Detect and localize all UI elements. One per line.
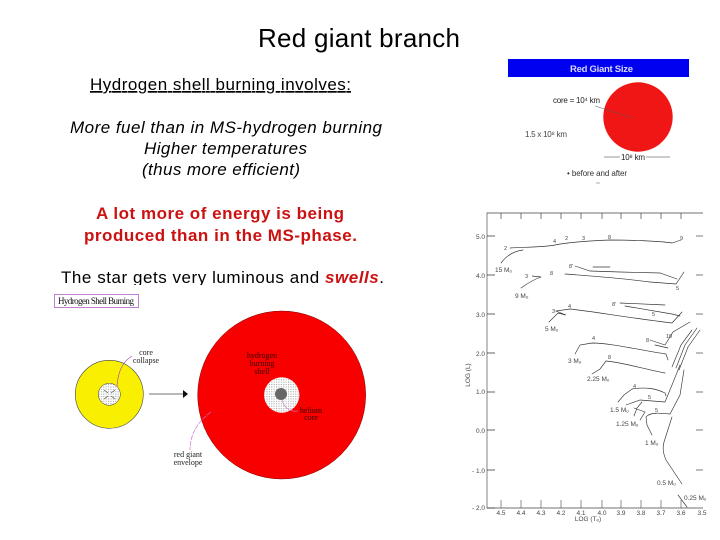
- evolution tracks: [501, 240, 700, 507]
- mass labels: 2.25 Mₒ: [587, 376, 610, 383]
- mass labels: 5 Mₒ: [545, 326, 559, 333]
- x axis labels: 4.5: [496, 510, 506, 517]
- text block: hydrogen shell burning: Hydrogen shell burning involves:: [90, 75, 351, 94]
- 0.25 solar mass track: [678, 495, 687, 507]
- core label: core = 10⁴ km: [553, 96, 600, 105]
- 0.5 solar mass track: [663, 417, 682, 484]
- 1 solar mass track: [646, 370, 684, 435]
- core collapse label: [117, 348, 160, 387]
- 9 solar mass track: [521, 272, 684, 288]
- x axis labels: 4.0: [597, 510, 607, 517]
- x axis labels: 3.7: [656, 510, 666, 517]
- red giant envelope label: [174, 412, 211, 467]
- x axis labels: [496, 510, 707, 523]
- yellow star: [75, 360, 143, 428]
- y axis labels: 1.0: [476, 389, 485, 396]
- y axis labels: - 1.0: [472, 468, 485, 475]
- track point numbers: 2: [504, 246, 507, 252]
- core collapse label: collapse: [133, 356, 160, 365]
- y axis labels: 0.0: [476, 428, 485, 435]
- blue header bar: [508, 59, 689, 77]
- mass labels: 1 Mₒ: [645, 440, 659, 447]
- helium core label: core: [304, 413, 318, 422]
- diagram label box: Hydrogen Shell Burning: [58, 296, 134, 306]
- 2.25 solar mass track: [592, 361, 665, 374]
- x axis labels: 4.3: [536, 510, 546, 517]
- helium core label: helium: [300, 406, 323, 415]
- x axis labels: 3.8: [636, 510, 646, 517]
- core collapse label: core: [139, 348, 153, 357]
- size label: 1.5 x 10⁸ km: [525, 130, 567, 139]
- 1.5 and 1.25 solar mass tracks: [618, 388, 666, 402]
- y axis labels: - 2.0: [472, 505, 485, 512]
- track point numbers: 3: [582, 236, 585, 242]
- chart: HR diagram of stellar evolution tracks: [465, 213, 707, 523]
- track point numbers: 8': [612, 302, 616, 308]
- y axis labels: 2.0: [476, 351, 485, 358]
- core label: [553, 96, 632, 118]
- x axis labels: 4.4: [516, 510, 526, 517]
- track point numbers: 8: [608, 235, 611, 241]
- x axis labels: 4.2: [556, 510, 566, 517]
- red giant circle: [603, 82, 673, 152]
- x axis labels: LOG (Tₑ): [575, 516, 601, 523]
- text block: energy statement in red: produced than in the MS-phase.: [84, 226, 357, 245]
- mass labels: 9 Mₒ: [515, 293, 529, 300]
- hydrogen burning shell label: [247, 351, 277, 376]
- mass labels: 0.25 Mₒ: [684, 495, 707, 502]
- x axis labels: 3.6: [676, 510, 686, 517]
- arrow: [149, 390, 188, 398]
- track point numbers: 4: [633, 384, 636, 390]
- diameter dimension: 10⁸ km: [621, 153, 645, 162]
- track point numbers: 4: [592, 336, 595, 342]
- track point numbers: 5: [652, 312, 655, 318]
- x axis labels: 3.5: [697, 510, 707, 517]
- x axis labels: 3.9: [616, 510, 626, 517]
- y axis labels: 4.0: [476, 273, 485, 280]
- mass labels: 15 Mₒ: [495, 267, 512, 274]
- y axis labels: 3.0: [476, 312, 485, 319]
- mass labels: [495, 267, 707, 502]
- track point numbers: 8: [608, 355, 611, 361]
- track point numbers: 5: [655, 408, 658, 414]
- mass labels: 0.5 Mₒ: [657, 480, 676, 487]
- y axis labels: 5.0: [476, 234, 485, 241]
- text block: hydrogen shell burning: More fuel than in MS-hydrogen burning: [70, 118, 383, 137]
- text block: hydrogen shell burning: Higher temperatures: [144, 139, 308, 158]
- 15 solar mass track: [501, 240, 681, 263]
- text block: hydrogen shell burning: (thus more efficient): [142, 160, 300, 179]
- text block: energy statement in red: A lot more of energy is being: [96, 204, 344, 223]
- track point numbers: 3: [525, 274, 528, 280]
- blue header bar: Red Giant Size: [570, 64, 633, 75]
- red giant envelope label: red giant: [174, 450, 203, 459]
- text block: energy statement in red: [84, 204, 357, 245]
- track point numbers: 5: [648, 395, 651, 401]
- hydrogen burning shell label: shell: [254, 367, 270, 376]
- track point numbers: 2: [565, 236, 568, 242]
- track point numbers: 8: [550, 271, 553, 277]
- track point numbers: 8': [569, 264, 573, 270]
- track point numbers: 4: [553, 239, 556, 245]
- track point numbers: [504, 235, 683, 414]
- track point numbers: 10: [666, 334, 672, 340]
- diagram label box: [54, 294, 138, 308]
- bullet note: • before and after: [567, 169, 627, 178]
- 5 solar mass track: [549, 309, 682, 323]
- mass labels: 1.25 Mₒ: [616, 421, 639, 428]
- chart axes: [487, 213, 703, 508]
- text block: hydrogen shell burning: [70, 75, 383, 179]
- track point numbers: 9: [680, 236, 683, 242]
- mass labels: 1.5 Mₒ: [610, 407, 629, 414]
- diameter dimension: [604, 152, 670, 162]
- y axis labels: LOG (L): [465, 363, 472, 387]
- red giant star: [198, 311, 366, 479]
- mass labels: 3 Mₒ: [568, 358, 582, 365]
- track point numbers: 3: [552, 309, 555, 315]
- panel: hydrogen shell burning diagram: [54, 294, 366, 479]
- title: Red giant branch: [258, 23, 460, 53]
- hydrogen burning shell label: hydrogen: [247, 351, 277, 360]
- x axis labels: 4.1: [576, 510, 586, 517]
- y axis labels: [465, 234, 485, 512]
- text block: star swells: The star gets very luminous and swells.: [61, 268, 384, 287]
- hydrogen burning shell label: burning: [250, 359, 274, 368]
- 3 solar mass track: [575, 343, 668, 360]
- panel: red giant size: [508, 59, 689, 183]
- red giant envelope label: envelope: [174, 458, 203, 467]
- panel: clipping edge of diagram: [50, 285, 390, 490]
- track point numbers: 8: [646, 338, 649, 344]
- track point numbers: 5: [676, 286, 679, 292]
- track point numbers: 4: [568, 304, 571, 310]
- helium core label: [282, 400, 323, 422]
